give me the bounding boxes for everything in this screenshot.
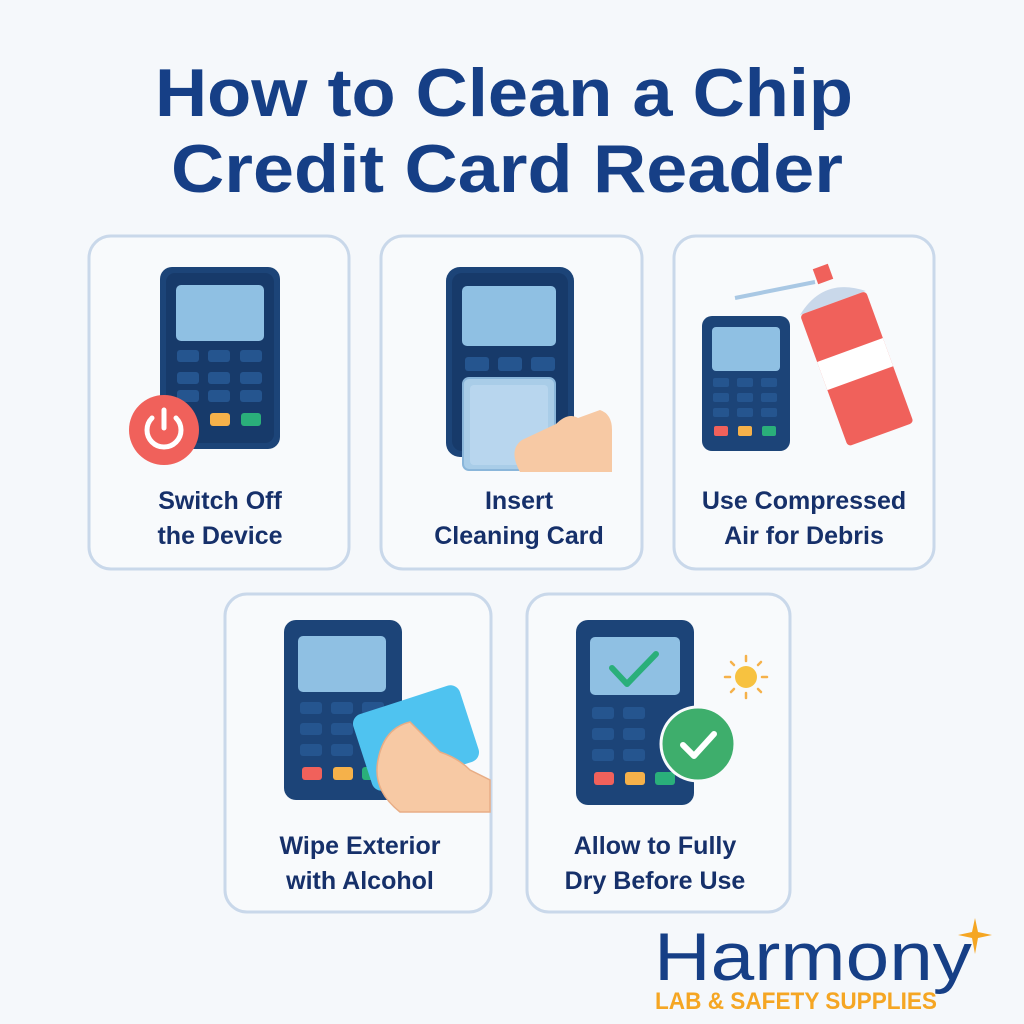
label: Air for Debris xyxy=(724,522,884,550)
icon: card reader 3 xyxy=(702,316,790,451)
label xyxy=(280,832,441,895)
panel: wipe xyxy=(225,594,491,912)
label: Switch Off xyxy=(158,487,282,515)
logo: LAB & SAFETY SUPPLIES xyxy=(655,988,937,1015)
icon: cloth and hand xyxy=(350,683,490,812)
label xyxy=(565,832,745,895)
label xyxy=(434,487,604,550)
icon: power xyxy=(129,395,199,465)
panel: dry xyxy=(527,594,790,912)
icon: check badge xyxy=(661,707,735,781)
logo: Harmony xyxy=(654,919,972,995)
icon: card reader 1 xyxy=(160,267,280,449)
title: How to Clean a Chip xyxy=(155,55,853,131)
label: Allow to Fully xyxy=(574,832,736,860)
title xyxy=(155,55,853,207)
icon: card reader 2 xyxy=(446,267,574,457)
panel: compressed air xyxy=(674,236,934,569)
label: Dry Before Use xyxy=(565,867,745,895)
panel: insert card xyxy=(381,236,642,569)
icon: hand xyxy=(514,410,612,472)
label: Cleaning Card xyxy=(434,522,604,550)
icon: card reader 5 xyxy=(576,620,694,805)
icon: card reader 4 xyxy=(284,620,402,800)
label xyxy=(702,487,906,550)
icon: cleaning card xyxy=(463,378,555,470)
label: Use Compressed xyxy=(702,487,906,515)
icon: sun xyxy=(725,656,767,698)
label: Wipe Exterior xyxy=(280,832,441,860)
icon: sparkle xyxy=(958,918,992,954)
icon: spray can xyxy=(735,264,914,447)
panel: switch off xyxy=(89,236,349,569)
label: with Alcohol xyxy=(285,867,434,895)
label: Insert xyxy=(485,487,554,515)
label xyxy=(157,487,283,550)
logo xyxy=(654,918,992,1015)
label: the Device xyxy=(157,522,283,550)
title: Credit Card Reader xyxy=(171,131,843,207)
